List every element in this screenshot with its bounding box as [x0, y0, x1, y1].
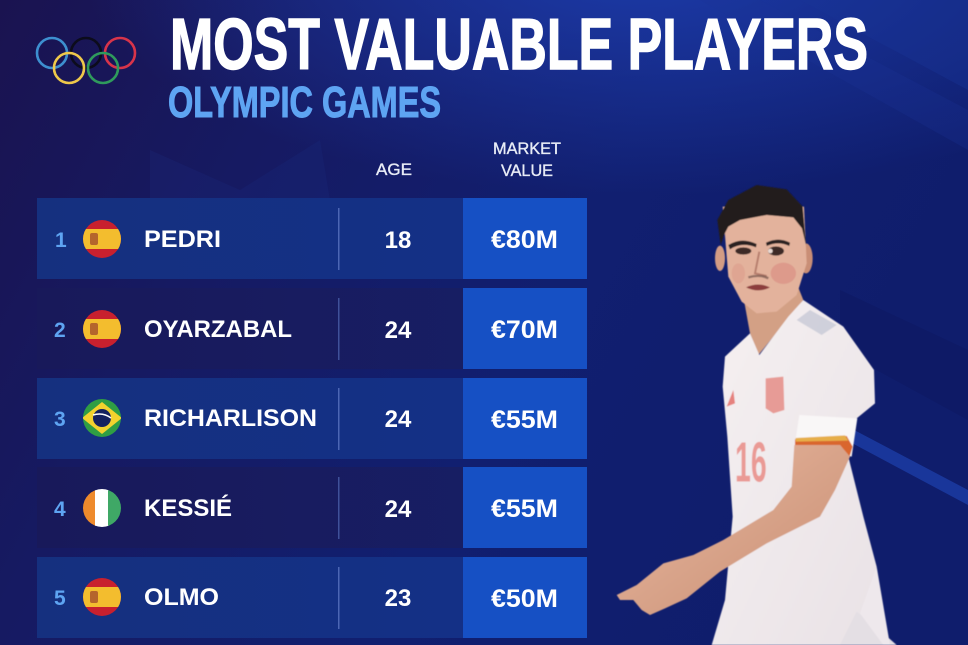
crest	[766, 377, 784, 413]
player illustration	[617, 185, 897, 645]
shorts	[833, 610, 897, 645]
eyes	[735, 247, 751, 255]
face	[723, 207, 807, 313]
column header: market value	[493, 139, 561, 180]
hair	[717, 185, 806, 245]
subtitle: OLYMPIC GAMES	[168, 78, 441, 127]
ear	[715, 246, 725, 271]
shoulder detail	[797, 310, 837, 335]
arm and hand	[617, 445, 850, 615]
brand mark	[727, 390, 735, 407]
row 2: Oyarzabal: OYARZABAL	[144, 316, 292, 343]
row 3: Richarlison: RICHARLISON	[144, 405, 317, 432]
row 2: Oyarzabal: 2	[54, 319, 66, 342]
row 4: Kessié: €55M	[491, 495, 558, 523]
row 2: Oyarzabal: 24	[385, 317, 412, 344]
icon: Spain flag	[82, 577, 122, 617]
row 5: Olmo: 23	[385, 585, 411, 612]
icon: Brazil flag	[82, 398, 122, 438]
icon: Spain flag	[82, 219, 122, 259]
column header: age: AGE	[376, 160, 412, 179]
row 5: Olmo: €50M	[491, 585, 558, 613]
nose and mouth	[755, 252, 767, 276]
row 4: Kessié	[37, 467, 587, 548]
row 1: Pedri: PEDRI	[144, 226, 221, 253]
row 1: Pedri	[37, 198, 587, 279]
shirt	[712, 300, 877, 645]
row 4: Kessié: 24	[385, 496, 412, 523]
sleeve cuff	[795, 415, 857, 457]
shirt number: 16	[735, 432, 767, 495]
icon: Ivory Coast flag	[82, 488, 122, 528]
row 2: Oyarzabal	[37, 288, 587, 369]
row 1: Pedri: €80M	[491, 226, 558, 254]
row 3: Richarlison	[37, 378, 587, 459]
column header: market value: MARKET	[493, 139, 561, 158]
neck	[743, 283, 803, 355]
row 1: Pedri: 18	[385, 227, 411, 254]
row 4: Kessié: KESSIÉ	[144, 494, 232, 522]
row 5: Olmo: 5	[54, 587, 66, 610]
icon: olympic rings	[37, 38, 135, 83]
cheeks	[771, 263, 796, 284]
eyebrows	[728, 241, 757, 249]
row 2: Oyarzabal: €70M	[491, 316, 558, 344]
icon: Spain flag	[82, 309, 122, 349]
row 3: Richarlison: 24	[385, 406, 412, 433]
row 5: Olmo	[37, 557, 587, 638]
column header: market value: VALUE	[501, 161, 553, 180]
row 5: Olmo: OLMO	[144, 584, 219, 611]
row 4: Kessié: 4	[54, 498, 66, 521]
row 3: Richarlison: 3	[54, 408, 66, 431]
row 1: Pedri: 1	[55, 229, 67, 252]
row 3: Richarlison: €55M	[491, 406, 558, 434]
